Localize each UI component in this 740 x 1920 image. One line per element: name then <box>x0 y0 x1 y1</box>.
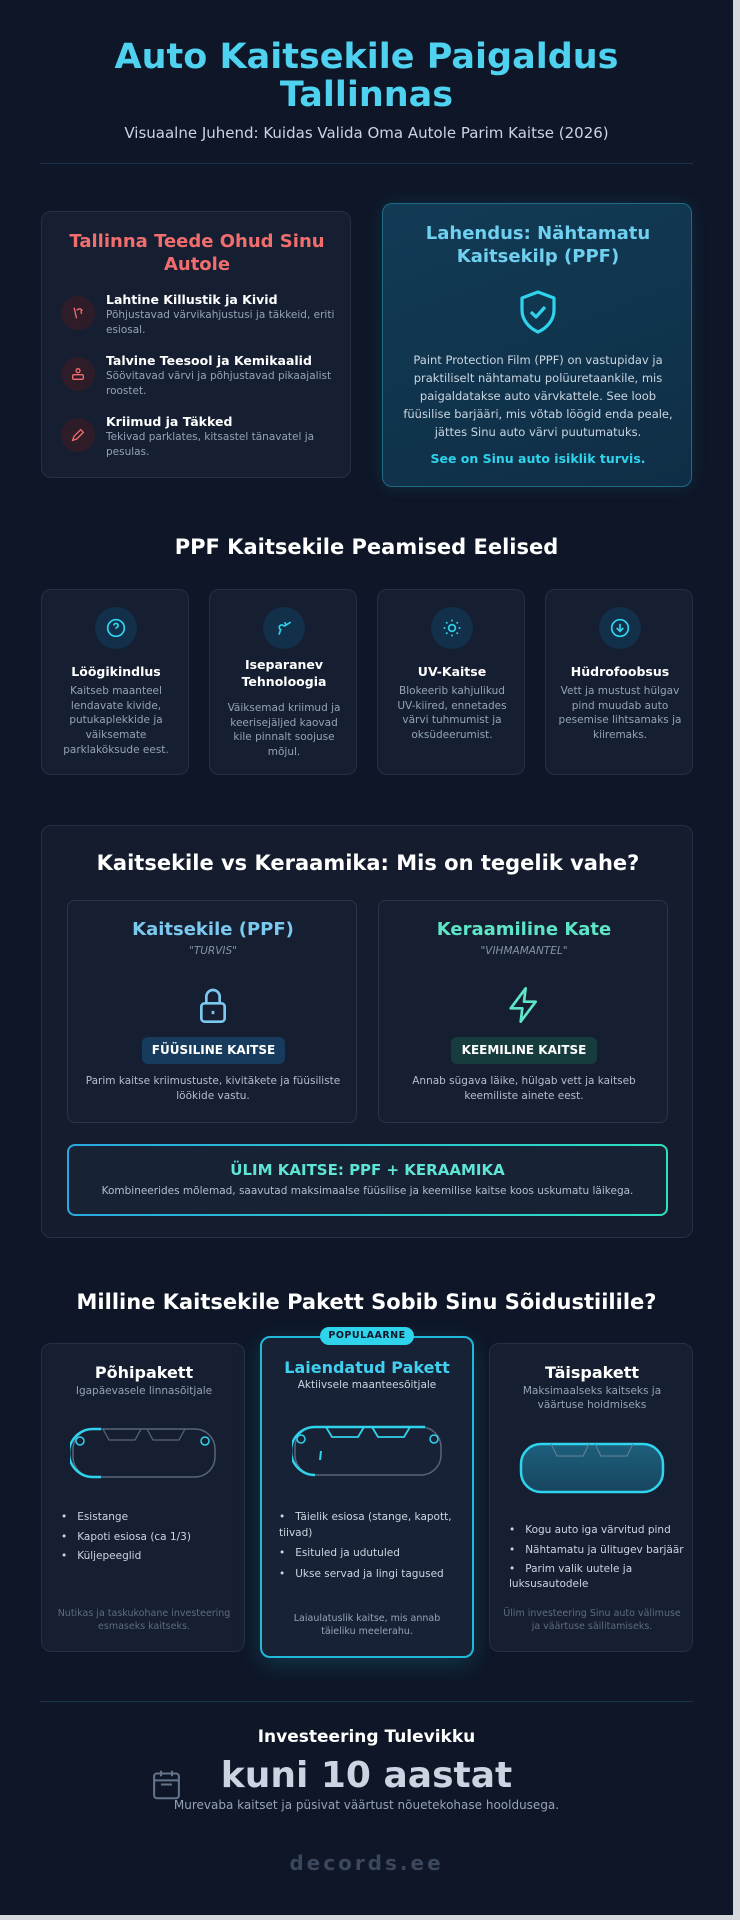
panel: PPF vs ceramic <box>41 825 693 1238</box>
list: full features <box>509 1524 684 1590</box>
badge: popular <box>320 1327 414 1345</box>
sub-card: PPF: Parim kaitse kriimustuste, kivitäkete ja füüsiliste löökide vastu. <box>86 1075 340 1102</box>
icon: lightning <box>509 987 538 1023</box>
package: extended: Laiaulatuslik kaitse, mis annab täieliku meelerahu. <box>294 1613 440 1637</box>
item: gravel: Lahtine Killustik ja Kivid <box>106 292 278 307</box>
item: gravel: Põhjustavad värvikahjustusi ja täkkeid, eriti esiosal. <box>106 309 334 336</box>
heading: hazards: Tallinna Teede Ohud Sinu <box>69 231 325 252</box>
card: impact: Löögikindlus <box>71 664 161 679</box>
callout: ultimate protection <box>67 1144 668 1216</box>
card: impact: Kaitseb maanteel lendavate kivide, putukaplekkide ja väiksemate parklaköksude eest. <box>63 685 169 756</box>
item: salt: Talvine Teesool ja Kemikaalid <box>106 353 312 368</box>
list: basic features: • Küljepeeglid <box>61 1550 141 1562</box>
list: full features: • Kogu auto iga värvitud pind <box>509 1524 671 1536</box>
item: scratches: Kriimud ja Täkked <box>106 414 232 429</box>
icon: car front outline <box>70 1428 216 1478</box>
card: hydrophobic: Vett ja mustust hülgav pind muudab auto pesemise lihtsamaks ja kiiremaks. <box>559 685 681 741</box>
callout: ultimate protection: Kombineerides mõlemad, saavutad maksimaalse füüsilise ja keemilise kaitse koos uskumatu läikega. <box>102 1185 633 1197</box>
heading: hazards <box>69 231 325 275</box>
icon: salt <box>61 357 95 391</box>
badge: chemical <box>451 1037 597 1064</box>
heading: benefits: PPF Kaitsekile Peamised Eelised <box>175 535 558 559</box>
card: hydrophobic: Hüdrofoobsus <box>571 664 669 679</box>
sub-card: ceramic: Annab sügava läike, hülgab vett ja kaitseb keemiliste ainete eest. <box>412 1075 636 1102</box>
heading: solution: Lahendus: Nähtamatu <box>426 223 650 244</box>
subtitle: Visuaalne Juhend: Kuidas Valida Oma Autole Parim Kaitse (2026) <box>124 124 609 142</box>
sub-card: PPF: Kaitsekile (PPF) <box>132 919 294 940</box>
package: full: Täispakett <box>545 1363 639 1382</box>
list: full features: • Parim valik uutele ja luksusautodele <box>509 1563 632 1590</box>
card: self-healing: Tehnoloogia <box>242 674 326 689</box>
item: salt <box>61 353 331 396</box>
sub-card: ceramic: Keraamiline Kate <box>437 919 611 940</box>
badge: physical: FÜÜSILINE KAITSE <box>152 1043 275 1057</box>
badge: chemical: KEEMILINE KAITSE <box>462 1043 586 1057</box>
card: hydrophobic <box>545 589 693 775</box>
sub-card: ceramic: "VIHMAMANTEL" <box>480 945 568 957</box>
package: basic: Põhipakett <box>95 1363 193 1382</box>
list: basic features: • Esistange <box>61 1511 128 1523</box>
title: Tallinnas <box>280 75 453 115</box>
package: extended <box>260 1336 474 1658</box>
icon: lock <box>200 988 226 1023</box>
icon: pencil <box>61 418 95 452</box>
card: impact <box>41 589 189 775</box>
list: extended features: • Täielik esiosa (stange, kapott, tiivad) <box>279 1511 452 1538</box>
callout: ultimate protection: ÜLIM KAITSE: PPF + KERAAMIKA <box>230 1161 505 1179</box>
item: gravel <box>61 292 334 336</box>
list: extended features: • Ukse servad ja lingi tagused <box>279 1568 444 1580</box>
stat: up to 10 years: kuni 10 aastat <box>221 1755 512 1796</box>
sub-card: PPF <box>67 900 357 1123</box>
text: investment note: Murevaba kaitset ja püsivat väärtust nõuetekohase hooldusega. <box>174 1798 559 1812</box>
icon: car full coverage <box>520 1442 664 1494</box>
badge: physical <box>142 1037 285 1064</box>
heading: investment: Investeering Tulevikku <box>258 1727 475 1747</box>
sub-card: PPF: "TURVIS" <box>189 945 237 957</box>
heading: hazards: Autole <box>164 254 230 275</box>
card: UV <box>377 589 525 775</box>
title <box>114 37 618 115</box>
card: self-healing <box>209 589 357 775</box>
package: basic: Nutikas ja taskukohane investeering esmaseks kaitseks. <box>58 1608 230 1632</box>
item: salt: Söövitavad värvi ja põhjustavad pikaajalist roostet. <box>106 370 331 396</box>
card: UV: UV-Kaitse <box>418 664 486 679</box>
list: basic features <box>61 1511 191 1562</box>
list: basic features: • Kapoti esiosa (ca 1/3) <box>61 1530 191 1542</box>
card: self-healing: Iseparanev <box>245 657 323 672</box>
icon: shield <box>520 290 556 334</box>
icon: calendar <box>153 1770 180 1800</box>
package: full: Ülim investeering Sinu auto välimuse ja väärtuse säilitamiseks. <box>503 1608 681 1632</box>
text: PPF description: Paint Protection Film (PPF) on vastupidav ja praktiliselt nähtamatu polüuretaankile, mis paigaldatakse auto värvkattele. See loob füüsilise barjääri, mis võtab löögid enda peale, jättes Sinu auto värvi puutumatuks. <box>403 353 673 439</box>
title: Auto Kaitsekile Paigaldus <box>114 37 618 77</box>
icon: car front partial <box>292 1426 442 1476</box>
text: tagline: See on Sinu auto isiklik turvis. <box>430 451 646 466</box>
list: full features: • Nähtamatu ja ülitugev barjäär <box>509 1544 684 1556</box>
list: extended features <box>279 1511 452 1580</box>
heading: solution: Kaitsekilp (PPF) <box>457 246 619 267</box>
footer: brand: decords.ee <box>289 1851 444 1875</box>
icon: sun <box>431 607 473 649</box>
package: full: Maksimaalseks kaitseks ja väärtuse hoidmiseks <box>523 1385 661 1411</box>
heading: solution <box>426 223 650 267</box>
card: self-healing: Väiksemad kriimud ja keerisejäljed kaovad kile pinnalt soojuse mõjul. <box>228 702 340 758</box>
sub-card: ceramic <box>378 900 668 1123</box>
icon: stone <box>61 296 95 330</box>
badge: popular: POPULAARNE <box>328 1330 406 1341</box>
package: basic: Igapäevasele linnasõitjale <box>76 1385 212 1397</box>
heading: packages: Milline Kaitsekile Pakett Sobib Sinu Sõidustiilile? <box>77 1290 656 1314</box>
package: basic <box>41 1343 245 1652</box>
item: scratches: Tekivad parklates, kitsastel tänavatel ja pesulas. <box>106 431 314 458</box>
icon: arrow down circle <box>599 607 641 649</box>
heading: comparison: Kaitsekile vs Keraamika: Mis on tegelik vahe? <box>97 851 639 875</box>
package: full <box>489 1343 693 1652</box>
package: extended: Aktiivsele maanteesõitjale <box>298 1379 436 1391</box>
icon: question <box>95 607 137 649</box>
panel: solution PPF <box>382 203 692 487</box>
icon: heat gun <box>263 607 305 649</box>
package: extended: Laiendatud Pakett <box>284 1358 450 1377</box>
list: extended features: • Esituled ja udutuled <box>279 1547 400 1559</box>
panel: road hazards <box>41 211 351 478</box>
card: UV: Blokeerib kahjulikud UV-kiired, ennetades värvi tuhmumist ja oksüdeerumist. <box>397 685 507 741</box>
item: scratches <box>61 414 314 458</box>
